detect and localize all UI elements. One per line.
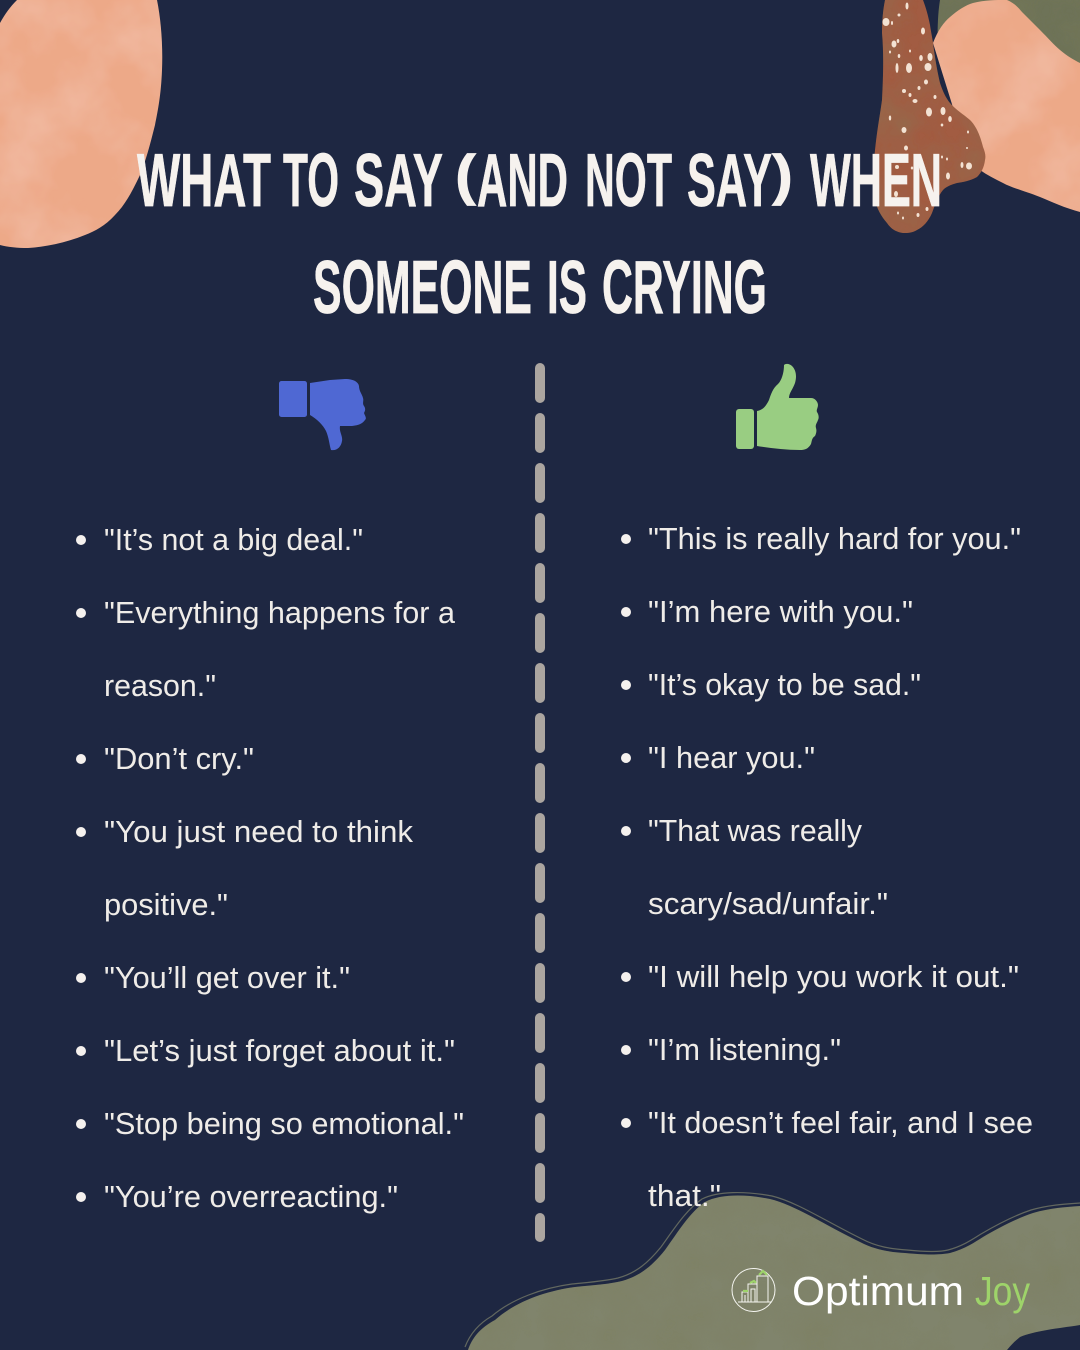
bullets: not to say xyxy=(76,535,86,1202)
title line 2: SOMEONE xyxy=(313,245,532,329)
blob: top-left peach xyxy=(0,0,162,248)
divider: dashed vertical line xyxy=(535,363,545,1242)
icon: thumbs up xyxy=(736,364,819,450)
item text: not to say: "You’ll get over it." xyxy=(104,960,350,995)
title line 1: SAY xyxy=(354,138,443,222)
item text: to say: "This is really hard for you." xyxy=(648,521,1021,556)
logo wordmark: Optimum: Optimum xyxy=(792,1268,964,1314)
title xyxy=(137,138,942,329)
title line 1: NOT xyxy=(585,138,672,222)
item text: not to say: reason." xyxy=(104,668,216,703)
logo icon: city in circle xyxy=(732,1268,775,1312)
item text: to say: "I’m here with you." xyxy=(648,594,913,629)
item text: to say: that." xyxy=(648,1178,721,1213)
title line 2: IS xyxy=(547,245,587,329)
item text: to say xyxy=(648,521,1033,1213)
list: what to say xyxy=(621,521,1033,1213)
item text: not to say: positive." xyxy=(104,887,228,922)
item text: not to say: "It’s not a big deal." xyxy=(104,522,363,557)
logo rooftop greenery xyxy=(743,1271,767,1291)
icon: thumbs down xyxy=(279,379,366,450)
item text: to say: "I’m listening." xyxy=(648,1032,841,1067)
item text: not to say: "Stop being so emotional." xyxy=(104,1106,464,1141)
item text: to say: "It’s okay to be sad." xyxy=(648,667,921,702)
item text: to say: "I hear you." xyxy=(648,740,815,775)
title line 1: WHAT xyxy=(137,138,271,222)
logo: Optimum Joy xyxy=(732,1268,1030,1314)
item text: not to say: "Don’t cry." xyxy=(104,741,254,776)
item text: not to say: "Let’s just forget about it." xyxy=(104,1033,455,1068)
item text: not to say: "Everything happens for a xyxy=(104,595,456,630)
brown shape speckles xyxy=(882,2,972,220)
blob: top-right peach xyxy=(933,0,1080,212)
logo wordmark: Joy: Joy xyxy=(975,1268,1030,1314)
blob: top-right sage xyxy=(938,0,1080,90)
title line 1: WHEN xyxy=(810,138,942,222)
item text: not to say: "You just need to think xyxy=(104,814,413,849)
title line 1 xyxy=(137,138,942,222)
title line 1: SAY xyxy=(687,138,772,222)
bullets: to say xyxy=(621,534,631,1128)
title line 1: ) xyxy=(772,143,793,206)
title line 2: CRYING xyxy=(602,245,767,329)
title line 1: TO xyxy=(283,138,339,222)
item text: not to say xyxy=(104,522,464,1214)
item text: not to say: "You’re overreacting." xyxy=(104,1179,398,1214)
blob: brown speckled shape xyxy=(874,0,985,233)
title line 1: AND xyxy=(477,138,568,222)
blob: bottom sage xyxy=(465,1193,1080,1350)
item text: to say: "It doesn’t feel fair, and I see xyxy=(648,1105,1033,1140)
title line 1: ( xyxy=(455,143,476,206)
list: what not to say xyxy=(76,522,464,1214)
item text: to say: scary/sad/unfair." xyxy=(648,886,888,921)
item text: to say: "That was really xyxy=(648,813,862,848)
item text: to say: "I will help you work it out." xyxy=(648,959,1019,994)
